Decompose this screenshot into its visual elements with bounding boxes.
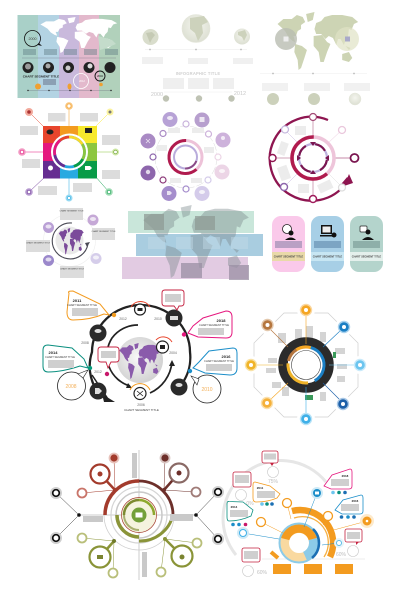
callout: top red speech <box>162 290 184 310</box>
card: teal: CHART SEGMENT TITLE <box>352 256 382 258</box>
callout: 2014 <box>43 345 88 372</box>
percent labels: 60% <box>336 552 347 558</box>
label box: right: CHART SEGMENT TITLE <box>91 230 116 233</box>
ring nodes <box>88 313 192 376</box>
satellite icons <box>246 304 366 424</box>
callout: 2011 small <box>253 482 280 502</box>
ring: crimson and lavender <box>162 134 209 180</box>
panel: pale globes timeline: 2000 <box>151 92 163 98</box>
card: pink: CHART SEGMENT TITLE <box>274 256 304 258</box>
panel: pale green world map timeline <box>260 12 370 105</box>
panel: maroon arrow ring diagram <box>269 114 358 202</box>
callout: 2011 <box>67 291 109 320</box>
ring icons <box>130 302 172 400</box>
callout: 2014 small: 2014 <box>231 505 238 509</box>
panel: olive and brown radial diagram <box>50 450 224 580</box>
panel: colour square with ring <box>18 102 120 202</box>
callout: 2016: 2016 <box>222 354 231 359</box>
callout: red right <box>345 529 362 545</box>
card: pink <box>272 216 305 272</box>
callout: 2011: CHART SEGMENT TITLE <box>67 303 97 307</box>
panel: pale globes timeline <box>142 14 253 102</box>
year labels <box>81 317 177 407</box>
panel: pale globes timeline: 2012 <box>234 91 246 97</box>
heading: chart segment title: CHART SEGMENT TITLE <box>124 408 159 412</box>
callout: middle red speech <box>98 347 119 368</box>
label box: left: CHART SEGMENT TITLE <box>26 242 51 244</box>
bubble: 2010 <box>191 375 221 403</box>
panel: world map with colour bands <box>122 205 263 280</box>
pale person rings <box>236 466 358 576</box>
icon rings <box>237 487 374 548</box>
panel: world map timeline with coloured strips: 2012 <box>79 79 85 83</box>
year labels: 2010 <box>154 317 162 321</box>
callout: red top <box>262 451 278 466</box>
callout: 2014: 2014 <box>49 350 58 355</box>
panel: city ring diagram <box>242 301 369 428</box>
connector lines <box>257 316 354 413</box>
heading: chart segment title: CHART SEGMENT TITLE <box>23 74 59 78</box>
ring: nested arcs <box>283 128 343 188</box>
callout: year 2000: 2000 <box>28 37 36 41</box>
skyline <box>266 326 347 401</box>
year labels: 2012 <box>94 370 102 374</box>
connectors <box>243 493 367 545</box>
year labels: 2004 <box>169 351 177 355</box>
callout: 2016 small <box>335 495 363 514</box>
percent labels: 0% <box>246 501 254 507</box>
callout: 2011 small: 2011 <box>257 486 264 490</box>
panel: world map timeline with coloured strips <box>18 15 120 98</box>
junctions <box>77 488 198 543</box>
ring: black with colour segments <box>281 340 331 390</box>
bubble: 2008: 2008 <box>65 384 77 390</box>
callout: 2016 <box>193 348 237 375</box>
rings <box>104 480 174 550</box>
callout: 2018: CHART SEGMENT TITLE <box>199 323 229 327</box>
small icons <box>78 454 202 578</box>
globe <box>117 337 163 383</box>
dark icon bubbles <box>90 310 188 400</box>
callout: 2014 small <box>227 501 253 521</box>
pins <box>90 464 192 568</box>
bubble: 2010: 2010 <box>201 387 213 393</box>
card: teal <box>350 216 383 272</box>
panel: orange half-donut diagram <box>223 451 374 576</box>
black rings <box>50 486 224 545</box>
year labels: 2008 <box>81 341 89 345</box>
half donut <box>271 510 333 562</box>
panel: globe with purple continents <box>26 208 116 278</box>
year labels: 2012 <box>119 317 127 321</box>
dot triplets <box>231 491 356 526</box>
callout: 2018 <box>188 311 232 338</box>
panel: world map timeline with coloured strips: 2004 <box>97 74 103 78</box>
callout: 2011: 2011 <box>73 298 82 303</box>
orange boxes <box>273 564 353 574</box>
callout: 2014: CHART SEGMENT TITLE <box>45 355 75 359</box>
panel: purple radial diagram <box>140 112 230 201</box>
percent labels <box>246 479 347 576</box>
card: blue: CHART SEGMENT TITLE <box>313 256 343 258</box>
label box: top: CHART SEGMENT TITLE <box>59 210 84 212</box>
callout: 2018 small: 2018 <box>342 474 349 478</box>
heading: infographic title: INFOGRAPHIC TITLE <box>176 71 220 76</box>
percent labels: 60% <box>257 570 268 576</box>
card: blue <box>311 216 344 272</box>
bubble: 2008 <box>58 370 88 400</box>
ring <box>49 132 90 172</box>
percent labels: 75% <box>268 479 279 485</box>
callout: red bottom-left <box>242 548 260 562</box>
callout: 2016 small: 2016 <box>352 499 359 503</box>
callout: 2016: CHART SEGMENT TITLE <box>204 359 234 363</box>
year labels: 2006 <box>137 403 145 407</box>
callout: red left <box>233 472 251 487</box>
label box: bottom: CHART SEGMENT TITLE <box>60 268 85 270</box>
callout: 2018 small <box>324 469 352 489</box>
callout: 2018: 2018 <box>217 318 226 323</box>
panel: black ring timeline with globe <box>43 290 237 412</box>
